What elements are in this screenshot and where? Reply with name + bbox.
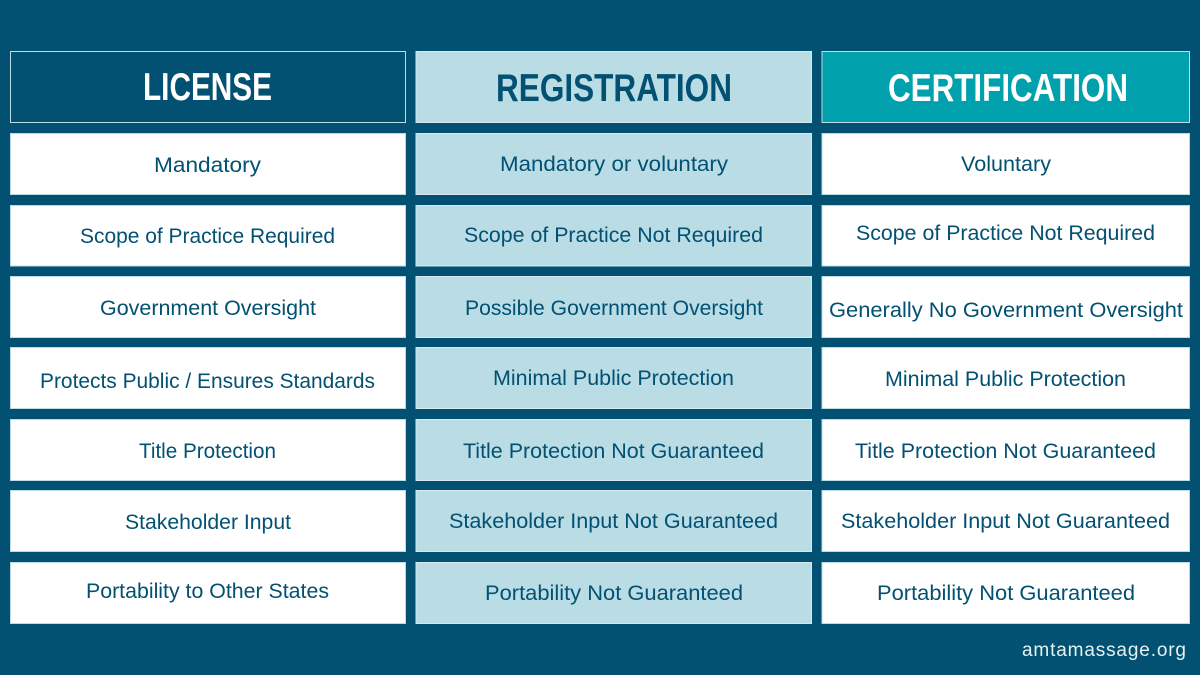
cell: stakeholder input not guaranteed: Stakeholder Input Not Guaranteed bbox=[449, 510, 778, 533]
cell: minimal public protection bbox=[416, 348, 812, 408]
cell: government oversight bbox=[10, 276, 406, 338]
cell: scope of practice not required bbox=[822, 206, 1190, 266]
cell: title protection not guaranteed bbox=[822, 420, 1190, 480]
cell: scope of practice not required: Scope of Practice Not Required bbox=[856, 222, 1155, 245]
footer: website: amtamassage.org bbox=[1022, 640, 1186, 661]
cell: portability not guaranteed: Portability Not Guaranteed bbox=[485, 582, 743, 605]
cell: title protection not guaranteed bbox=[416, 420, 812, 480]
header: license bbox=[10, 52, 406, 122]
cell: portability not guaranteed: Portability Not Guaranteed bbox=[877, 582, 1135, 605]
cell: scope of practice required: Scope of Practice Required bbox=[80, 225, 335, 248]
cell: stakeholder input not guaranteed bbox=[416, 490, 812, 552]
header: license: LICENSE bbox=[143, 66, 272, 109]
column: license bbox=[10, 52, 406, 624]
cell: stakeholder input: Stakeholder Input bbox=[125, 511, 291, 534]
cell: voluntary: Voluntary bbox=[961, 153, 1052, 176]
cell: scope of practice required bbox=[10, 206, 406, 266]
cell: mandatory or voluntary bbox=[416, 134, 812, 194]
cell: government oversight: Government Oversight bbox=[100, 297, 316, 320]
cell: possible government oversight bbox=[416, 276, 812, 338]
cell: portability not guaranteed bbox=[822, 562, 1190, 624]
cell: minimal public protection bbox=[822, 348, 1190, 408]
cell: protects public: Protects Public / Ensures Standards bbox=[40, 370, 375, 393]
cell: stakeholder input not guaranteed bbox=[822, 490, 1190, 552]
header: certification bbox=[822, 52, 1190, 122]
cell: title protection not guaranteed: Title Protection Not Guaranteed bbox=[855, 440, 1156, 463]
cell: stakeholder input not guaranteed: Stakeholder Input Not Guaranteed bbox=[841, 510, 1170, 533]
cell: generally no government oversight bbox=[822, 276, 1190, 338]
cell: minimal public protection: Minimal Public Protection bbox=[493, 367, 734, 390]
cell: title protection: Title Protection bbox=[139, 440, 276, 463]
column: registration bbox=[416, 52, 812, 624]
header: certification: CERTIFICATION bbox=[888, 67, 1128, 110]
cell: scope of practice not required bbox=[416, 206, 812, 266]
cell: minimal public protection: Minimal Public Protection bbox=[885, 368, 1126, 391]
cell: protects public bbox=[10, 348, 406, 408]
cell: generally no government oversight: Generally No Government Oversight bbox=[829, 299, 1183, 322]
header: registration: REGISTRATION bbox=[496, 67, 732, 110]
cell: portability not guaranteed bbox=[416, 562, 812, 624]
cell: mandatory or voluntary: Mandatory or voluntary bbox=[500, 153, 729, 176]
cell: stakeholder input bbox=[10, 490, 406, 552]
cell: possible government oversight: Possible Government Oversight bbox=[465, 297, 763, 320]
cell: portability to other states: Portability to Other States bbox=[86, 580, 329, 603]
cell: mandatory: Mandatory bbox=[154, 154, 262, 177]
cell: portability to other states bbox=[10, 562, 406, 624]
header: registration bbox=[416, 52, 812, 122]
cell: title protection not guaranteed: Title Protection Not Guaranteed bbox=[463, 440, 764, 463]
cell: mandatory bbox=[10, 134, 406, 194]
cell: voluntary bbox=[822, 134, 1190, 194]
cell: scope of practice not required: Scope of Practice Not Required bbox=[464, 224, 763, 247]
cell: title protection bbox=[10, 420, 406, 480]
column: certification bbox=[822, 52, 1190, 624]
